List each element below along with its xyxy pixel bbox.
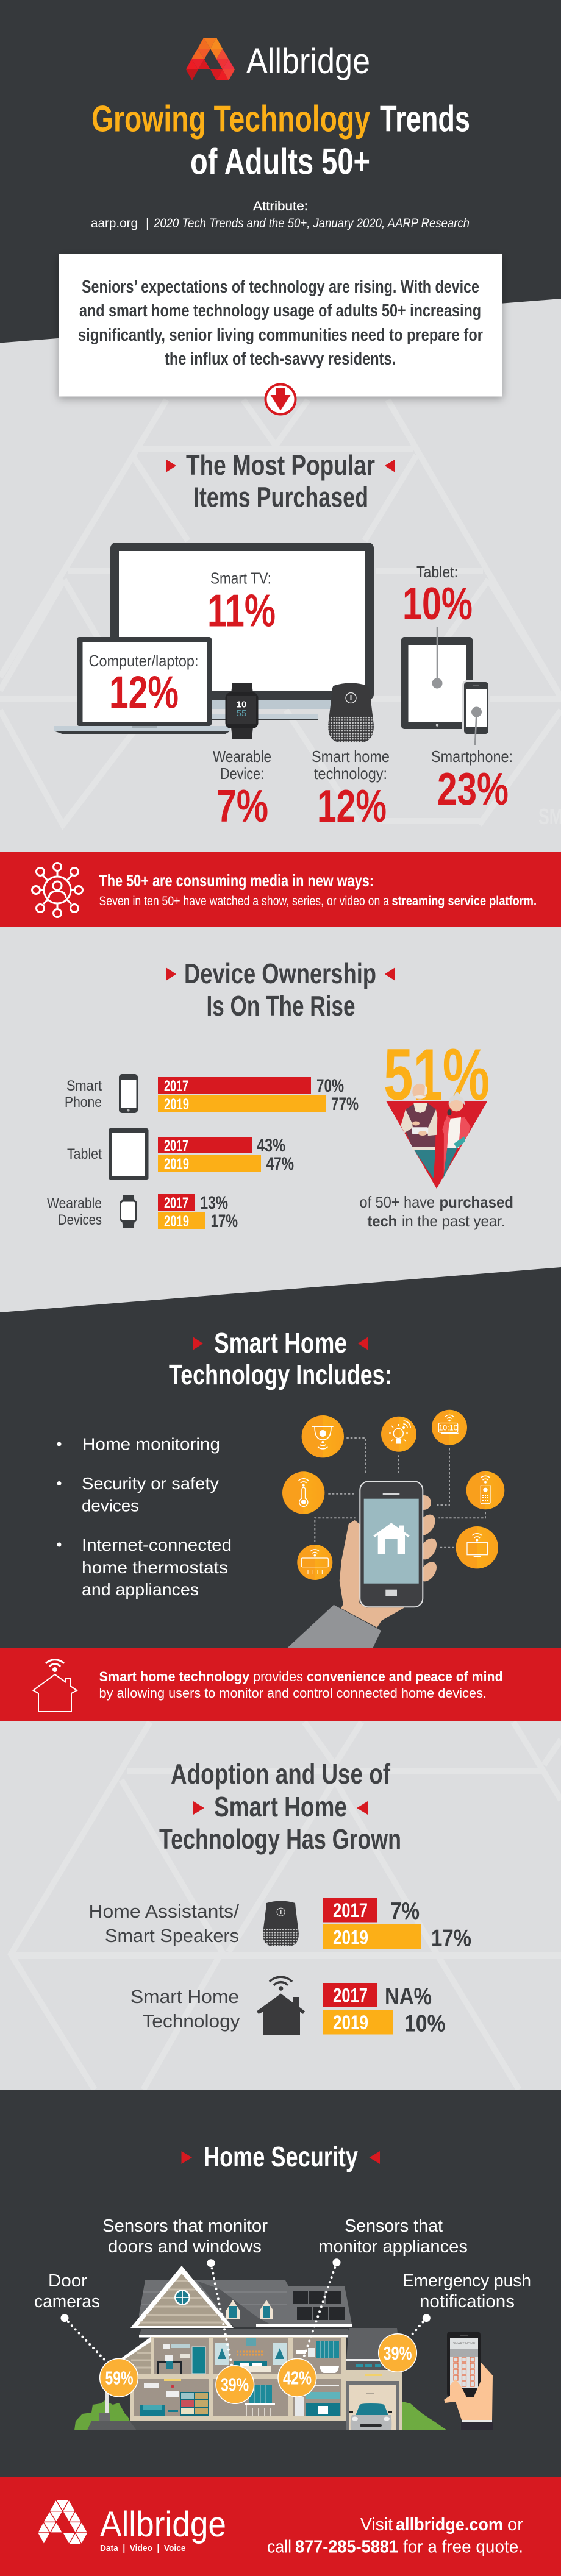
roof xyxy=(139,2280,352,2337)
bar chart: smart phone: 2017 xyxy=(164,1078,188,1095)
call to action: or xyxy=(507,2515,523,2535)
panel: header xyxy=(0,0,561,415)
bar chart: smart home technology: NA% xyxy=(385,1984,432,2010)
device: laptop: Computer/laptop: xyxy=(89,652,199,670)
illustration: hand holding phone with app xyxy=(444,2332,493,2430)
bar chart: smart home technology: 10% xyxy=(404,2010,445,2037)
bar chart: tablet xyxy=(67,1128,294,1180)
icon: alarm clock xyxy=(432,1410,467,1445)
icon: down arrow xyxy=(266,384,295,415)
bullet list: Security or safety xyxy=(82,1474,219,1493)
bar chart: tablet: 2019 xyxy=(164,1156,189,1173)
front gable xyxy=(130,2266,234,2328)
bushes xyxy=(74,2400,447,2430)
icon: television xyxy=(456,1526,498,1568)
device: smart speaker: technology: xyxy=(314,764,387,783)
heading: device ownership: Device Ownership xyxy=(184,958,376,989)
attribution: 2020 Tech Trends and the 50+, January 2020, AARP Research xyxy=(153,216,470,230)
callout: 51 percent purchased tech xyxy=(360,1034,513,1230)
heading: adoption and use of smart home: Technology Has Grown xyxy=(159,1823,401,1855)
bar chart: smart phone: 2019 xyxy=(164,1096,189,1113)
callout: door cameras: Door xyxy=(48,2271,88,2291)
banner text: convenience and peace of mind xyxy=(307,1669,502,1684)
bar chart: smart phone xyxy=(65,1074,359,1114)
banner text: Seven in ten 50+ have watched a show, series, or video on a xyxy=(99,894,389,908)
bar chart: wearable devices: 17% xyxy=(211,1211,238,1231)
panel: adoption and use xyxy=(89,1758,471,2037)
bar chart: smart phone: 77% xyxy=(331,1094,359,1114)
callout: emergency push notifications: 39% xyxy=(383,2343,412,2364)
heading: smart home includes: Smart Home xyxy=(214,1327,347,1359)
bar chart: smart phone: Phone xyxy=(65,1094,102,1111)
device: laptop: 12% xyxy=(109,667,179,718)
banner text xyxy=(99,1669,502,1701)
bar chart: smart phone: 70% xyxy=(316,1076,344,1096)
house body and rooms xyxy=(120,2337,346,2421)
bar chart: wearable devices: Wearable xyxy=(47,1195,102,1212)
title: Trends xyxy=(380,99,470,139)
bullet list xyxy=(57,1435,232,1599)
callout: emergency push notifications: notifications xyxy=(420,2292,515,2311)
logo: Allbridge white: Allbridge xyxy=(100,2505,226,2544)
call to action: for a free quote. xyxy=(403,2537,523,2556)
icon: hand holding phone xyxy=(288,1481,440,1648)
bar chart: home assistants and smart speakers: 2017 xyxy=(333,1899,368,1921)
logo: Allbridge white: Data | Video | Voice xyxy=(100,2544,185,2553)
bar chart: tablet: 2017 xyxy=(164,1137,188,1155)
callout: appliance sensors: 42% xyxy=(283,2368,312,2388)
title xyxy=(91,99,470,182)
bar chart: wearable devices xyxy=(47,1193,238,1231)
banner: consuming media xyxy=(0,852,561,927)
device: smart TV: Smart TV: xyxy=(210,569,271,588)
furniture: bedroom xyxy=(215,2338,287,2372)
device: wearable watch: 55 xyxy=(237,708,246,719)
panel: most popular items purchased xyxy=(54,449,513,831)
bar chart: smart home technology: 2019 xyxy=(333,2012,368,2033)
icon: alarm clock: 10:10 xyxy=(438,1424,458,1432)
heading: adoption and use of smart home: Adoption and Use of xyxy=(171,1758,391,1790)
bar chart: tablet: 47% xyxy=(266,1154,294,1174)
call to action: allbridge.com xyxy=(396,2515,503,2535)
icon: network person xyxy=(32,863,83,917)
title: of Adults 50+ xyxy=(190,141,370,182)
icon: remote control xyxy=(466,1471,504,1509)
banner: convenience and peace of mind xyxy=(0,1648,561,1721)
device: smartphone: Smartphone: xyxy=(431,747,513,766)
intro text box xyxy=(59,254,502,396)
callout: door and window sensors: Sensors that monitor xyxy=(102,2216,268,2236)
panel: smart home technology xyxy=(0,1267,561,1648)
bar chart: home assistants and smart speakers: 17% xyxy=(431,1925,471,1952)
furniture: office xyxy=(157,2344,205,2374)
heading: items purchased: The Most Popular xyxy=(186,449,375,481)
callout: appliance sensors xyxy=(278,2216,468,2397)
attribution: Attribute: xyxy=(253,199,308,213)
callout: 51 percent purchased tech: purchased xyxy=(439,1193,513,1211)
call to action xyxy=(267,2515,523,2556)
dormers xyxy=(226,2300,273,2319)
banner text: provides xyxy=(253,1669,303,1684)
heading: items purchased xyxy=(166,449,395,513)
device: smart speaker xyxy=(312,683,390,831)
bar chart: smart phone: Smart xyxy=(66,1078,102,1094)
icon: security camera xyxy=(302,1415,344,1457)
attribution: | xyxy=(146,216,149,230)
callout: emergency push notifications xyxy=(379,2271,531,2372)
banner text: The 50+ are consuming media in new ways: xyxy=(99,871,374,890)
logo: Allbridge: Allbridge xyxy=(246,41,370,81)
callout lines and dots xyxy=(61,2258,431,2365)
callout: 51 percent purchased tech: in the past year. xyxy=(402,1212,505,1230)
heading: adoption and use of smart home xyxy=(159,1758,401,1855)
heading: smart home includes: Technology Includes: xyxy=(169,1359,391,1390)
banner text: by allowing users to monitor and control connected home devices. xyxy=(99,1685,487,1701)
callout: door cameras: 59% xyxy=(105,2368,133,2388)
bar chart: home assistants and smart speakers: Smart Speakers xyxy=(105,1925,239,1946)
bar chart: smart home technology xyxy=(130,1977,445,2037)
icon: thermometer xyxy=(282,1471,324,1514)
device: laptop xyxy=(54,637,230,734)
icon: smart house outline xyxy=(33,1660,77,1712)
furniture: bathroom xyxy=(296,2341,339,2373)
bar chart: home assistants and smart speakers: 2019 xyxy=(333,1926,368,1948)
call to action: 877-285-5881 xyxy=(295,2537,398,2556)
heading: device ownership xyxy=(166,958,395,1022)
bar chart: smart home technology: Smart Home xyxy=(130,1986,239,2007)
callout: door cameras: cameras xyxy=(34,2292,100,2311)
panel: home security xyxy=(0,2090,561,2477)
logo: Allbridge xyxy=(186,38,370,81)
icon: air conditioner xyxy=(297,1545,332,1580)
device: tablet: Tablet: xyxy=(416,563,458,581)
bullet list: devices xyxy=(82,1496,139,1515)
heading: adoption and use of smart home: Smart Home xyxy=(214,1791,347,1823)
device: smartphone xyxy=(431,681,513,814)
bullet list: Internet-connected xyxy=(82,1535,232,1554)
illustration: cutaway house xyxy=(74,2266,447,2430)
call to action: call xyxy=(267,2537,291,2556)
logo: Allbridge white xyxy=(38,2500,226,2553)
callout: door cameras xyxy=(34,2271,138,2397)
device: tablet: 10% xyxy=(402,578,473,629)
bar chart: tablet: 43% xyxy=(257,1136,285,1156)
bar chart: home assistants and smart speakers: Home Assistants/ xyxy=(89,1901,239,1922)
attribution xyxy=(91,199,470,230)
device: wearable watch: Wearable xyxy=(213,747,271,766)
device: smart TV xyxy=(110,543,374,720)
callout: emergency push notifications: Emergency push xyxy=(402,2271,531,2291)
callout: door and window sensors: doors and windows xyxy=(108,2237,262,2257)
callout: appliance sensors: Sensors that xyxy=(345,2216,443,2236)
bullet list: home thermostats xyxy=(82,1558,228,1577)
callout: 51 percent purchased tech: 51% xyxy=(384,1034,490,1115)
heading: device ownership: Is On The Rise xyxy=(206,990,355,1022)
bar chart: smart home technology: 2017 xyxy=(333,1985,368,2007)
callout: door and window sensors xyxy=(102,2216,268,2403)
bar chart: smart home technology: Technology xyxy=(143,2010,240,2032)
illustration: older couple xyxy=(401,1084,471,1178)
intro text box: significantly, senior living communities need to prepare for xyxy=(78,326,483,345)
bar chart: wearable devices: Devices xyxy=(58,1212,102,1228)
device: smartphone: 23% xyxy=(437,763,509,814)
callout: 51 percent purchased tech: tech xyxy=(367,1212,397,1230)
call to action: Visit xyxy=(360,2515,393,2535)
heading: items purchased: Items Purchased xyxy=(193,482,368,513)
furniture: living room and library xyxy=(140,2379,209,2416)
device: smart speaker: 12% xyxy=(317,780,387,831)
callout: door and window sensors: 39% xyxy=(221,2374,249,2396)
icon: light bulb xyxy=(381,1417,416,1452)
bar chart: home assistants and smart speakers xyxy=(89,1898,471,1952)
attribution: aarp.org xyxy=(91,216,138,230)
bullet list: and appliances xyxy=(82,1580,199,1599)
car xyxy=(349,2403,392,2430)
bar chart: wearable devices: 13% xyxy=(200,1193,228,1213)
intro text box: the influx of tech-savvy residents. xyxy=(165,349,396,369)
panel: device ownership xyxy=(47,958,513,1231)
banner text xyxy=(99,871,537,908)
heading: smart home includes xyxy=(169,1327,391,1390)
device: wearable watch xyxy=(213,683,271,831)
garage xyxy=(346,2328,402,2430)
device: wearable watch: 7% xyxy=(216,780,268,831)
bar chart: wearable devices: 2019 xyxy=(164,1213,189,1230)
device: smart TV: 11% xyxy=(207,585,276,636)
device: tablet xyxy=(401,563,473,729)
panel: footer xyxy=(0,2477,561,2576)
device: wearable watch: 10 xyxy=(237,700,246,710)
illustration: phone connected to smart devices xyxy=(282,1410,504,1648)
illustration: hand holding phone with app: SMART HOME xyxy=(452,2342,476,2346)
foundation and steps xyxy=(87,2388,346,2430)
heading: home security: Home Security xyxy=(204,2141,358,2172)
device: smart speaker: Smart home xyxy=(312,747,390,766)
callout: appliance sensors: monitor appliances xyxy=(318,2237,468,2257)
device: wearable watch: Device: xyxy=(220,764,264,783)
bar chart: tablet: Tablet xyxy=(67,1146,102,1162)
callout: 51 percent purchased tech: of 50+ have xyxy=(360,1193,435,1211)
title: Growing Technology xyxy=(91,99,370,139)
furniture: dining room and kitchen xyxy=(245,2385,340,2416)
bullet list: Home monitoring xyxy=(82,1435,220,1453)
solar panels xyxy=(293,2291,345,2320)
banner text: Smart home technology xyxy=(99,1669,250,1684)
bar chart: home assistants and smart speakers: 7% xyxy=(390,1898,420,1924)
bar chart: wearable devices: 2017 xyxy=(164,1195,188,1212)
banner text: streaming service platform. xyxy=(391,894,537,908)
